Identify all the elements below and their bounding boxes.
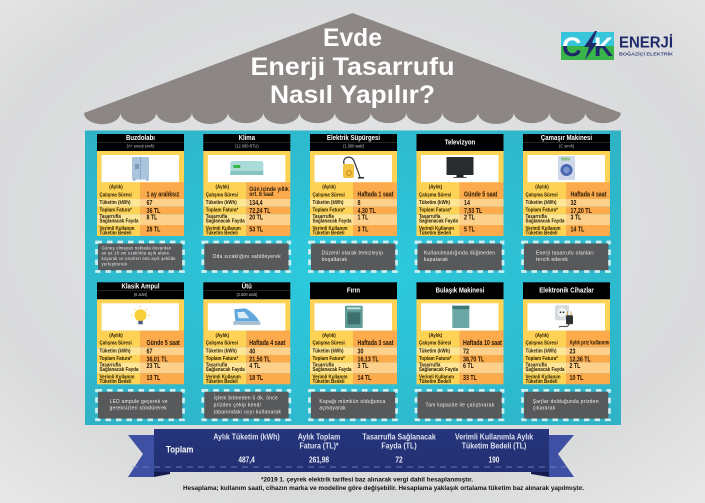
card: Buzdolabı bbox=[96, 134, 184, 272]
column: monthly consumption: 487,4 bbox=[238, 455, 256, 465]
table: Verimli Kullanım bbox=[313, 226, 348, 232]
icon: oven bbox=[345, 306, 363, 328]
table: Haftada 4 saat bbox=[249, 339, 285, 347]
icon: fridge bbox=[132, 157, 149, 180]
tip bbox=[310, 390, 396, 420]
table bbox=[416, 182, 504, 237]
header: Elektrik Süpürgesi bbox=[327, 135, 380, 142]
tip: Enerji tasarrufu olanları bbox=[536, 250, 594, 256]
tip: açmayarak bbox=[319, 405, 346, 412]
image box bbox=[523, 299, 610, 331]
table: Toplam Fatura* bbox=[313, 207, 345, 214]
tip bbox=[310, 242, 396, 272]
table: 2 TL bbox=[464, 214, 475, 222]
table bbox=[203, 331, 290, 385]
table bbox=[416, 331, 504, 385]
table bbox=[523, 331, 610, 385]
tip: yerleştirerek bbox=[102, 261, 128, 267]
table: 36 TL bbox=[147, 207, 161, 215]
header: (12.000 BTU) bbox=[235, 143, 259, 149]
panel: house wall bbox=[85, 130, 621, 425]
total label: Toplam bbox=[166, 444, 194, 455]
table: Sağlanacak Fayda bbox=[206, 366, 245, 373]
title: Nasıl Yapılır? bbox=[270, 81, 435, 109]
table: Tüketim Bedeli bbox=[206, 230, 238, 237]
table: Tüketim Bedeli bbox=[419, 379, 452, 385]
tip: kapatarak bbox=[424, 257, 448, 263]
tip: en az 10 cm uzaklıkta açık alana bbox=[102, 250, 169, 256]
column: efficient cost: Tüketim Bedeli (TL) bbox=[462, 441, 527, 451]
header: Çamaşır Makinesi bbox=[541, 135, 592, 142]
table: Toplam Fatura* bbox=[526, 355, 558, 362]
tip: Kullanılmadığında düğmeden bbox=[424, 250, 495, 256]
table: Verimli Kullanım bbox=[526, 226, 561, 232]
ribbon tails bbox=[128, 435, 574, 477]
tip bbox=[203, 390, 290, 420]
header: (C sınıfı) bbox=[559, 143, 575, 149]
table: Tasarrufla bbox=[313, 214, 334, 220]
tip: Tam kapasite ile çalıştırarak bbox=[426, 402, 494, 409]
table: (Aylık) bbox=[216, 184, 229, 191]
table: Verimli Kullanım bbox=[100, 374, 135, 380]
table: Tasarrufla bbox=[526, 214, 547, 220]
table: (Aylık) bbox=[216, 333, 229, 339]
table: Haftada 1 saat bbox=[358, 191, 393, 199]
table: (Aylık) bbox=[535, 333, 549, 339]
table: Toplam Fatura* bbox=[100, 355, 132, 362]
header: (A+ enerji sınıfı) bbox=[127, 143, 155, 149]
icon: vacuum cleaner bbox=[343, 157, 364, 179]
table: Çalışma Süresi bbox=[526, 340, 558, 347]
header bbox=[97, 134, 184, 151]
table: Sağlanacak Fayda bbox=[100, 218, 139, 225]
column: savings: Fayda (TL) bbox=[381, 441, 417, 451]
image box bbox=[416, 151, 504, 182]
column: efficient cost bbox=[455, 432, 534, 465]
tip: İşlem bitmeden 5 dk. önce bbox=[214, 394, 278, 402]
table: Tüketim (kWh) bbox=[419, 200, 450, 206]
column: savings: Tasarrufla Sağlanacak bbox=[362, 432, 436, 441]
table bbox=[203, 182, 290, 237]
column: efficient cost: Verimli Kullanımla Aylık bbox=[455, 432, 534, 441]
table: 4 TL bbox=[249, 362, 260, 370]
card: Klima bbox=[203, 134, 290, 272]
table: 14 TL bbox=[358, 374, 372, 382]
card: Elektronik Cihazlar bbox=[522, 282, 610, 420]
icon: socket and plug bbox=[555, 305, 573, 327]
table: 36,01 TL bbox=[147, 356, 168, 364]
card: Televizyon bbox=[416, 134, 504, 272]
table: Tüketim (kWh) bbox=[313, 200, 344, 206]
table: 7,53 TL bbox=[464, 207, 482, 215]
column: monthly consumption bbox=[213, 432, 280, 465]
header bbox=[523, 134, 610, 151]
table: Tüketim Bedeli bbox=[100, 379, 132, 385]
icon: light bulb bbox=[131, 306, 150, 324]
table: 72 bbox=[463, 348, 469, 356]
table: Günde 5 saat bbox=[147, 339, 180, 347]
card: Bulaşık Makinesi bbox=[416, 282, 504, 420]
table: Tüketim (kWh) bbox=[419, 348, 450, 354]
table: Haftada 4 saat bbox=[571, 191, 606, 199]
table: 20 TL bbox=[249, 214, 263, 222]
tip: LED ampule geçerek ve bbox=[110, 399, 168, 405]
table: Aylık priz kullanımı bbox=[570, 340, 610, 347]
tip bbox=[96, 390, 184, 420]
table: Tasarrufla bbox=[419, 214, 441, 220]
table bbox=[310, 182, 397, 237]
tip: çıkararak bbox=[533, 405, 555, 412]
column: monthly bill: Fatura (TL)* bbox=[300, 441, 340, 451]
image box bbox=[203, 151, 290, 182]
icon: air conditioner bbox=[230, 161, 263, 175]
card: Çamaşır Makinesi bbox=[522, 134, 610, 272]
tip: Şarjlar dolduğunda prizden bbox=[533, 399, 599, 405]
table: 30 bbox=[358, 348, 364, 356]
tip: koyarak ve ürünleri önü açık şekilde bbox=[102, 256, 176, 261]
table: Verimli Kullanım bbox=[206, 374, 241, 380]
tip: Kapağı mümkün olduğunca bbox=[319, 399, 386, 405]
tip bbox=[96, 242, 184, 272]
table: (Aylık) bbox=[429, 184, 443, 191]
tip: tercih ederek bbox=[536, 257, 568, 263]
table: Verimli Kullanım bbox=[419, 374, 454, 380]
table: Tasarrufla bbox=[419, 362, 441, 368]
table: Toplam Fatura* bbox=[419, 207, 451, 214]
table: Tüketim (kWh) bbox=[526, 348, 557, 354]
tip: Düzenli olarak temizleyip bbox=[322, 250, 383, 256]
table: Sağlanacak Fayda bbox=[526, 218, 565, 225]
table: 16,13 TL bbox=[358, 356, 379, 364]
header: (6 adet) bbox=[134, 291, 148, 297]
column: monthly consumption: Aylık Tüketim (kWh) bbox=[213, 432, 280, 441]
table: 21,50 TL bbox=[249, 356, 271, 364]
image box bbox=[97, 299, 184, 331]
header bbox=[97, 282, 184, 299]
header: Fırın bbox=[347, 287, 360, 295]
image box bbox=[523, 151, 610, 182]
header: (1.000 watt) bbox=[343, 143, 364, 149]
table: Tasarrufla bbox=[313, 362, 334, 368]
logo: CK Enerji: BOĞAZİÇİ ELEKTRİK bbox=[619, 50, 674, 58]
table: Tüketim (kWh) bbox=[100, 200, 131, 206]
table: 14 bbox=[464, 199, 470, 207]
table: Toplam Fatura* bbox=[313, 355, 345, 362]
table: (Aylık) bbox=[322, 333, 336, 339]
table: 33 TL bbox=[463, 374, 477, 382]
header: Buzdolabı bbox=[126, 135, 155, 142]
header: Elektronik Cihazlar bbox=[539, 287, 594, 295]
table: 72,24 TL bbox=[249, 207, 271, 215]
table: Haftada 10 saat bbox=[463, 339, 502, 347]
table: Günde 5 saat bbox=[464, 191, 497, 199]
table: Çalışma Süresi bbox=[313, 192, 345, 198]
table: 28 TL bbox=[147, 226, 161, 234]
logo: CK Enerji: C bbox=[562, 32, 582, 62]
table: Tüketim (kWh) bbox=[313, 348, 344, 354]
image box bbox=[203, 299, 290, 331]
table: 23 bbox=[570, 348, 576, 356]
header: Klima bbox=[239, 135, 255, 142]
table: 10 TL bbox=[570, 374, 584, 382]
table: 3 TL bbox=[358, 226, 369, 234]
logo: CK Enerji bbox=[561, 31, 674, 62]
table: 14 TL bbox=[571, 226, 585, 234]
table: (Aylık) bbox=[429, 333, 443, 339]
table: 53 TL bbox=[249, 226, 263, 234]
tip bbox=[522, 390, 610, 420]
table: Tüketim (kWh) bbox=[100, 348, 131, 354]
header: Televizyon bbox=[445, 139, 475, 146]
table bbox=[523, 182, 610, 237]
header: Klasik Ampul bbox=[121, 283, 160, 291]
column: monthly bill: Aylık Toplam bbox=[298, 432, 340, 441]
column: efficient cost: 190 bbox=[489, 455, 499, 465]
table: Tasarrufla bbox=[526, 362, 547, 368]
header: Bulaşık Makinesi bbox=[436, 287, 485, 295]
icon: dishwasher bbox=[452, 306, 469, 328]
table: Sağlanacak Fayda bbox=[419, 218, 458, 225]
tip: boşaltarak bbox=[322, 257, 347, 263]
table: Toplam Fatura* bbox=[206, 207, 238, 214]
card: Ütü bbox=[203, 281, 290, 420]
table: 12,36 TL bbox=[570, 356, 591, 364]
logo: CK Enerji: ENERJİ bbox=[619, 34, 673, 52]
table: ort. 8 saat bbox=[249, 191, 274, 198]
table: 18 TL bbox=[249, 374, 263, 382]
table bbox=[97, 331, 184, 385]
column: monthly bill: 261,98 bbox=[309, 455, 329, 465]
logo: CK Enerji: K bbox=[594, 32, 613, 62]
tip bbox=[416, 242, 503, 272]
table: Toplam Fatura* bbox=[206, 355, 238, 362]
table: 8 bbox=[358, 199, 361, 207]
table: Tasarrufla bbox=[206, 214, 227, 220]
table: Çalışma Süresi bbox=[419, 192, 452, 198]
table: 3 TL bbox=[571, 214, 582, 222]
table: Sağlanacak Fayda bbox=[313, 366, 352, 373]
tip: gereksizleri söndürerek bbox=[110, 405, 167, 412]
table: Çalışma Süresi bbox=[206, 192, 239, 198]
table: Verimli Kullanım bbox=[100, 226, 135, 232]
column: savings bbox=[362, 432, 436, 465]
logo: CK Enerji: C bbox=[562, 32, 582, 62]
icon: washing machine bbox=[558, 156, 575, 180]
header bbox=[203, 281, 290, 299]
title: Enerji Tasarrufu bbox=[250, 53, 454, 81]
table bbox=[310, 331, 397, 385]
table: 67 bbox=[147, 348, 153, 356]
table: 3 TL bbox=[358, 362, 369, 370]
table: Tüketim Bedeli bbox=[526, 379, 558, 385]
card: Elektrik Süpürgesi bbox=[310, 134, 397, 272]
card: Klasik Ampul bbox=[96, 282, 184, 420]
table: (Aylık) bbox=[109, 184, 123, 191]
table: Tüketim Bedeli bbox=[313, 230, 345, 237]
image box bbox=[310, 151, 397, 182]
table: 8 TL bbox=[147, 214, 158, 222]
table: 40 bbox=[249, 348, 256, 356]
logo: CK Enerji: K bbox=[594, 32, 613, 62]
table: Tasarrufla bbox=[100, 362, 121, 368]
table: 4,30 TL bbox=[358, 207, 376, 215]
table: Çalışma Süresi bbox=[206, 340, 239, 347]
table: Toplam Fatura* bbox=[419, 355, 451, 362]
header bbox=[310, 134, 397, 151]
table: Toplam Fatura* bbox=[100, 207, 132, 214]
table: 32 bbox=[571, 199, 577, 207]
ribbon folds bbox=[154, 472, 549, 477]
table: (Aylık) bbox=[322, 184, 336, 191]
ribbon body bbox=[154, 429, 549, 472]
table: 2 TL bbox=[570, 362, 581, 370]
table: Toplam Fatura* bbox=[526, 207, 558, 214]
table: Tüketim Bedeli bbox=[313, 379, 345, 385]
tip bbox=[522, 242, 610, 272]
card: Fırın bbox=[310, 282, 397, 420]
table: 13 TL bbox=[147, 374, 161, 382]
tip: Oda sıcaklığını sabitleyerek bbox=[213, 254, 281, 260]
header: (2.500 watt) bbox=[236, 291, 258, 297]
image box bbox=[310, 299, 397, 331]
table: Tüketim Bedeli bbox=[206, 379, 238, 385]
table: Tüketim Bedeli bbox=[526, 230, 558, 237]
icon: iron bbox=[233, 308, 260, 325]
table: Verimli Kullanım bbox=[526, 374, 561, 380]
table: 1 ay aralıksız bbox=[147, 191, 179, 199]
table: Tasarrufla bbox=[100, 214, 121, 220]
header: Ütü bbox=[242, 281, 252, 291]
header bbox=[203, 134, 290, 151]
table: Tüketim (kWh) bbox=[206, 348, 237, 354]
table: Tüketim (kWh) bbox=[526, 200, 557, 206]
tip: Güneş olmayan noktada duvardan bbox=[102, 245, 172, 250]
table: Tüketim Bedeli bbox=[419, 230, 452, 237]
table: Çalışma Süresi bbox=[100, 340, 132, 347]
table: Sağlanacak Fayda bbox=[419, 366, 458, 373]
table: 38,70 TL bbox=[463, 356, 484, 364]
table bbox=[97, 182, 184, 237]
image box bbox=[416, 299, 504, 331]
table: Çalışma Süresi bbox=[526, 192, 558, 198]
table: Tüketim (kWh) bbox=[206, 200, 237, 206]
table: Sağlanacak Fayda bbox=[206, 218, 245, 225]
roof bbox=[84, 13, 621, 124]
footnote: *2019 1. çeyrek elektrik tarifesi baz alınarak vergi dahil hesaplanmıştır. bbox=[261, 476, 473, 484]
table: Verimli Kullanım bbox=[313, 374, 348, 380]
table: Çalışma Süresi bbox=[100, 192, 132, 198]
table: (Aylık) bbox=[535, 184, 549, 191]
icon: television bbox=[446, 157, 474, 178]
table: Sağlanacak Fayda bbox=[526, 366, 565, 373]
table: Çalışma Süresi bbox=[313, 340, 345, 347]
tip: tabanındaki ısıyı kullanarak bbox=[214, 409, 281, 415]
table: Verimli Kullanım bbox=[419, 226, 454, 232]
table: 23 TL bbox=[147, 362, 161, 370]
column: savings: 72 bbox=[395, 455, 403, 465]
table: 6 TL bbox=[463, 362, 474, 370]
table: Gün içinde yıllık bbox=[249, 186, 289, 193]
column: monthly bill bbox=[298, 432, 340, 465]
table: 17,20 TL bbox=[571, 207, 592, 215]
banner: totals bbox=[128, 429, 574, 477]
table: Haftada 3 saat bbox=[358, 339, 393, 347]
table: Çalışma Süresi bbox=[419, 340, 452, 347]
table: Verimli Kullanım bbox=[206, 226, 241, 232]
table: (Aylık) bbox=[109, 333, 123, 339]
footnote bbox=[183, 476, 584, 492]
title bbox=[250, 24, 454, 109]
table: 1 TL bbox=[358, 214, 369, 222]
footnote: Hesaplama; kullanım saati, cihazın marka ve modeline göre değişebilir. Hesaplama yaklaşık ortalama tüketim baz alınarak yapılmıştır. bbox=[183, 485, 584, 492]
table: Tüketim Bedeli bbox=[100, 230, 132, 237]
tip: prizden çekip kendi bbox=[214, 402, 261, 408]
table: Tasarrufla bbox=[206, 362, 227, 368]
table: 5 TL bbox=[464, 226, 475, 234]
table: Sağlanacak Fayda bbox=[313, 218, 352, 225]
title: Evde bbox=[323, 24, 382, 52]
table: 67 bbox=[147, 199, 153, 207]
image box bbox=[97, 151, 184, 182]
table: 134,4 bbox=[249, 199, 263, 207]
table: Sağlanacak Fayda bbox=[100, 366, 139, 373]
